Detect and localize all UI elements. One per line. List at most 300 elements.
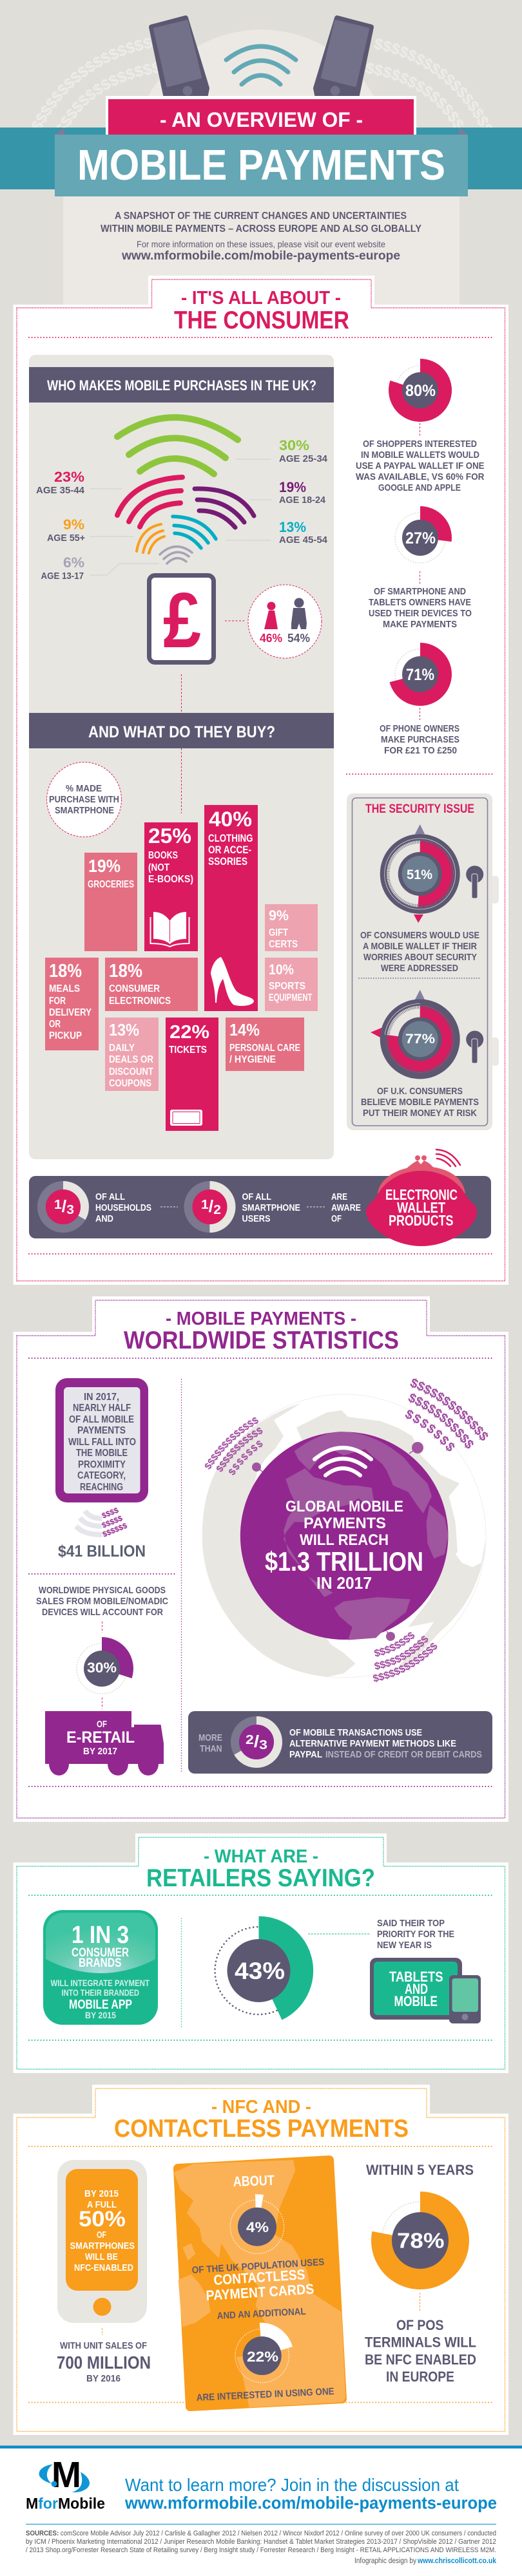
label: age 18-24 <box>250 479 326 506</box>
ribbon back <box>0 128 522 189</box>
text: unit sales: 700 MILLION <box>57 2353 151 2372</box>
bar: groceries <box>84 853 137 951</box>
icon: wifi on globe <box>314 1448 371 1475</box>
stat: 43 percent: 43% <box>235 1958 285 1984</box>
panel: two thirds band: ALTERNATIVE PAYMENT METHODS LIKE <box>289 1738 456 1749</box>
stat: 27 percent <box>369 506 472 630</box>
label: age 18-24: AGE 18-24 <box>279 495 326 506</box>
dome and arch backdrop <box>63 30 459 309</box>
bar: personal care: PERSONAL CARE <box>229 1043 300 1054</box>
bar: sports: EQUIPMENT <box>269 992 313 1003</box>
stat: 27 percent: OF SMARTPHONE AND <box>374 586 466 597</box>
label: age 18-24: 19% <box>279 479 306 495</box>
heading bar: what do they buy <box>29 713 334 748</box>
dollar clusters: $$$$$$$$$$$ <box>409 1394 474 1449</box>
bar: tickets: 22% <box>169 1022 209 1043</box>
design credit <box>354 2557 497 2565</box>
bar: daily deals: 13% <box>109 1020 139 1039</box>
panel: two thirds band: INSTEAD OF CREDIT OR DEBIT CARDS <box>325 1749 482 1760</box>
globe text: $1.3 TRILLION <box>265 1546 423 1577</box>
stat: 27 percent: USED THEIR DEVICES TO <box>369 608 472 619</box>
section heading: RETAILERS SAYING? <box>146 1864 375 1892</box>
panel: electronic wallet band <box>29 1150 491 1246</box>
heading bar: what do they buy: AND WHAT DO THEY BUY? <box>88 723 275 741</box>
stat: 71 percent: 71% <box>406 666 434 684</box>
donut: two thirds: / <box>254 1732 259 1751</box>
dollar clusters: $$$$$$$ <box>405 1410 455 1452</box>
card: one in three: 1 IN 3 <box>72 1922 129 1949</box>
donut: one half <box>188 1185 231 1229</box>
donut: one half: 2 <box>213 1203 221 1217</box>
stat: 80 percent: GOOGLE AND APPLE <box>378 482 461 493</box>
globe text: PAYMENTS <box>304 1515 386 1532</box>
footer <box>0 2446 522 2576</box>
panel: nfc and contactless <box>13 2085 508 2435</box>
section heading <box>146 1846 375 1892</box>
text: physical goods: DEVICES WILL ACCOUNT FOR <box>42 1607 163 1618</box>
donut: one third <box>41 1185 85 1229</box>
bar: daily deals <box>105 1018 159 1091</box>
icon: signal and dollars: $$$$$$ <box>101 1521 129 1539</box>
icon: phone with 2017 text: REACHING <box>80 1482 123 1493</box>
icon: purse: ELECTRONIC <box>385 1186 458 1203</box>
icon: phone with 2017 text: IN 2017, <box>84 1392 119 1403</box>
icon: phone with 50 percent: BY 2015 <box>84 2188 119 2199</box>
icon: delivery truck: BY 2017 <box>83 1746 117 1757</box>
logo: MforMobile: M <box>52 2454 81 2496</box>
logo: MforMobile <box>26 2454 105 2513</box>
dollar clusters: $$$$$$$ <box>229 1441 263 1475</box>
intro text <box>101 211 421 263</box>
text: physical goods <box>36 1585 168 1618</box>
dollar clusters: $$$$$$$$$$$$$$ <box>372 1643 437 1682</box>
icon: signal and dollars: $$$$ <box>101 1506 120 1520</box>
section heading: - IT'S ALL ABOUT - <box>181 288 341 308</box>
panel: retailers saying <box>13 1833 508 2073</box>
icon: signal and dollars: $$$$$ <box>101 1513 124 1530</box>
text: households <box>95 1191 151 1224</box>
bar: gift certs: GIFT <box>269 927 288 938</box>
panel: worldwide statistics: $41 BILLION <box>58 1542 146 1560</box>
label: age 13-17: AGE 13-17 <box>41 571 84 582</box>
uk map <box>174 2160 345 2407</box>
call to action <box>124 2475 497 2513</box>
section heading: - NFC AND - <box>211 2097 311 2117</box>
icon: tablet and mobile <box>370 1958 481 2023</box>
section frame <box>13 1296 508 1822</box>
card text: PAYMENT CARDS <box>206 2280 314 2304</box>
label: age 35-44: 23% <box>54 469 84 485</box>
section heading: - MOBILE PAYMENTS - <box>166 1309 356 1329</box>
ribbon front <box>55 135 468 196</box>
icon: left phone <box>151 18 207 98</box>
icon: phone with 50 percent: A FULL <box>87 2199 117 2210</box>
bar: sports: 10% <box>269 961 294 978</box>
text: smartphone users: USERS <box>242 1213 271 1224</box>
stat: 80 percent: WAS AVAILABLE, VS 60% FOR <box>356 471 485 482</box>
icon: signal and dollars <box>76 1506 129 1539</box>
label: age 55+: 9% <box>63 516 84 533</box>
intro text: A SNAPSHOT OF THE CURRENT CHANGES AND UNCERTAINTIES <box>115 211 407 222</box>
bar: meals: 18% <box>49 961 82 981</box>
text: are aware of: ARE <box>331 1191 347 1202</box>
icon: phone with 2017 text: PROXIMITY <box>78 1459 126 1470</box>
stat: 30 percent <box>77 1637 133 1694</box>
gender split circle <box>248 585 322 658</box>
text: households: OF ALL <box>95 1191 125 1202</box>
panel: two thirds band: OF MOBILE TRANSACTIONS USE <box>289 1727 422 1738</box>
text: physical goods: WORLDWIDE PHYSICAL GOODS <box>39 1585 166 1596</box>
bar: meals <box>45 958 99 1050</box>
bar: clothing: OR ACCE- <box>208 844 251 856</box>
text: uk consumers: BELIEVE MOBILE PAYMENTS <box>361 1097 479 1108</box>
icon: purse: PRODUCTS <box>389 1212 454 1229</box>
label: age 45-54: AGE 45-54 <box>279 535 328 545</box>
dollar clusters <box>205 1378 488 1682</box>
title banner <box>0 96 522 196</box>
stat: 71 percent <box>380 643 459 756</box>
dollar clusters: $$$$$$$$ <box>374 1632 415 1658</box>
label: age 13-17: 6% <box>63 554 84 571</box>
icon: woman <box>264 601 278 629</box>
bar: books <box>144 822 198 951</box>
card: one in three: BRANDS <box>79 1956 121 1970</box>
dollar clusters: $$$$$$$$$$$ <box>217 1427 263 1472</box>
bar: groceries: 19% <box>88 856 121 876</box>
panel: the security issue <box>347 793 499 1130</box>
gender split circle: 46% <box>260 632 282 645</box>
bar: tickets <box>166 1018 218 1131</box>
text: unit sales <box>57 2340 151 2384</box>
section heading <box>174 288 349 334</box>
stat: 71 percent: OF PHONE OWNERS <box>380 723 459 734</box>
text: are aware of: OF <box>331 1213 342 1224</box>
dial: 77 percent: 77% <box>405 1032 435 1046</box>
stat: 78 percent: IN EUROPE <box>386 2369 454 2385</box>
section frame <box>13 1833 508 2073</box>
icon: delivery truck <box>45 1711 164 1776</box>
text: consumers would use: A MOBILE WALLET IF THEIR <box>363 941 477 952</box>
bar: daily deals: DAILY <box>109 1043 135 1054</box>
section heading: - WHAT ARE - <box>204 1846 318 1867</box>
bar: personal care <box>226 1018 304 1071</box>
text: smartphone users: SMARTPHONE <box>242 1202 300 1213</box>
label: age 45-54: 13% <box>279 519 306 535</box>
icon: tablet and mobile: MOBILE <box>394 1993 438 2009</box>
donut: two thirds: 2 <box>246 1733 254 1747</box>
text: physical goods: SALES FROM MOBILE/NOMADIC <box>36 1596 168 1607</box>
dial: 51 percent <box>380 824 460 923</box>
icon: phone with 2017 text <box>55 1378 148 1502</box>
intro text: www.mformobile.com/mobile-payments-europe <box>121 249 400 263</box>
callout: legend circle: PURCHASE WITH <box>49 794 119 805</box>
label: age 55+: AGE 55+ <box>47 533 85 544</box>
bar: groceries: GROCERIES <box>88 879 134 890</box>
stat: 80 percent: OF SHOPPERS INTERESTED <box>363 439 477 450</box>
overview label <box>106 96 416 135</box>
stat: 78 percent: BE NFC ENABLED <box>365 2352 476 2367</box>
bar: electronics: 18% <box>109 961 142 981</box>
icon: purse: WALLET <box>397 1199 445 1216</box>
card: contactless payment card: ABOUT <box>233 2172 275 2190</box>
chart: age wifi arcs <box>117 417 254 564</box>
label: age 35-44 <box>36 469 122 496</box>
bar: electronics <box>105 958 198 1011</box>
bar: books: 25% <box>148 824 191 848</box>
stat: 71 percent: MAKE PURCHASES <box>381 734 459 745</box>
text: unit sales: BY 2016 <box>86 2373 121 2384</box>
donut: two thirds: 3 <box>259 1738 267 1752</box>
globe text: WILL REACH <box>300 1531 389 1549</box>
bar: personal care: 14% <box>229 1020 260 1039</box>
stat: 71 percent: FOR £21 TO £250 <box>384 745 457 756</box>
card: one in three: WILL INTEGRATE PAYMENT <box>50 1978 150 1988</box>
overview label: - AN OVERVIEW OF - <box>160 108 363 131</box>
design credit: www.chriscollicott.co.uk <box>417 2557 497 2565</box>
card text: CONTACTLESS <box>213 2266 305 2288</box>
bar: sports: SPORTS <box>269 981 305 992</box>
bar: clothing: SSORIES <box>208 855 247 867</box>
bar: books: BOOKS <box>148 850 178 861</box>
bar: meals: MEALS <box>49 983 80 994</box>
icon: phone with 50 percent: OF <box>97 2230 106 2240</box>
icon: phone with 50 percent <box>57 2160 147 2323</box>
bar: personal care: / HYGIENE <box>229 1054 276 1065</box>
chart: globe <box>202 1378 488 1682</box>
text: uk consumers: OF U.K. CONSUMERS <box>377 1086 463 1097</box>
label: age 25-34: AGE 25-34 <box>279 453 328 464</box>
bar: electronics: ELECTRONICS <box>109 996 171 1007</box>
donut: one third: 1 <box>54 1198 62 1212</box>
section heading: THE CONSUMER <box>174 307 349 334</box>
section heading: CONTACTLESS PAYMENTS <box>114 2115 409 2143</box>
stat: 22 percent: 22% <box>247 2349 278 2365</box>
sources <box>26 2530 496 2554</box>
stat: 4 percent <box>230 2194 284 2253</box>
label: age 13-17 <box>41 554 159 582</box>
icon: phone with 2017 text: CATEGORY, <box>77 1470 126 1481</box>
design credit: Infographic design by <box>354 2557 416 2565</box>
text: are aware of <box>331 1191 361 1224</box>
stat: 80 percent <box>356 359 485 493</box>
bar: daily deals: COUPONS <box>109 1078 151 1089</box>
card text: OF THE UK POPULATION USES <box>191 2257 325 2276</box>
callout: legend circle: % MADE <box>66 783 102 794</box>
icon: phone with 50 percent: WILL BE <box>85 2251 118 2262</box>
donut: one half: / <box>209 1197 213 1216</box>
icon: safe handle <box>466 1030 483 1063</box>
card: one in three <box>43 1910 158 2025</box>
icon: phone with 50 percent: NFC-ENABLED <box>74 2262 133 2273</box>
label: age 55+ <box>47 516 134 544</box>
label: age 25-34: 30% <box>279 437 309 453</box>
stat: 22 percent <box>235 2323 293 2383</box>
section heading <box>114 2097 409 2143</box>
stat: 78 percent: 78% <box>397 2228 445 2253</box>
panel: two thirds band: PAYPAL <box>289 1749 322 1760</box>
stat: 78 percent: WITHIN 5 YEARS <box>366 2162 474 2178</box>
donut: one half: 1 <box>201 1198 209 1212</box>
dollar clusters: $$$$$$$$$$$$$ <box>410 1378 488 1441</box>
text: top priority <box>377 1918 454 1951</box>
bar: sports <box>265 958 318 1011</box>
section frame <box>13 276 508 1285</box>
icon: high heel <box>211 957 254 1006</box>
outer world map <box>202 1394 486 1678</box>
section frame <box>13 2085 508 2435</box>
globe text: IN 2017 <box>316 1573 372 1593</box>
text: consumers would use: WORRIES ABOUT SECURITY <box>363 952 477 963</box>
card text: AND AN ADDITIONAL <box>217 2306 306 2322</box>
icon: safe handle <box>466 866 483 898</box>
card text <box>191 2257 325 2322</box>
callout: legend circle <box>46 762 121 837</box>
card: one in three: MOBILE APP <box>69 1998 132 2012</box>
text: households: AND <box>95 1213 113 1224</box>
bar: meals: OR <box>49 1019 61 1030</box>
icon: man <box>291 598 307 629</box>
bar: books: (NOT <box>148 862 169 873</box>
text: top priority: PRIORITY FOR THE <box>377 1929 454 1940</box>
icon: book <box>151 912 189 947</box>
label: age 45-54 <box>226 519 328 545</box>
section heading <box>124 1309 399 1354</box>
stat: 80 percent: 80% <box>405 382 436 400</box>
bar: tickets: TICKETS <box>169 1045 207 1056</box>
icon: delivery truck: OF <box>97 1719 107 1730</box>
label: age 25-34 <box>237 437 328 464</box>
icon: right phone <box>316 18 371 98</box>
intro text: For more information on these issues, please visit our event website <box>137 239 385 249</box>
section heading: WORLDWIDE STATISTICS <box>124 1327 399 1354</box>
label: age 35-44: AGE 35-44 <box>36 485 85 496</box>
globe text <box>265 1498 423 1593</box>
stat: 27 percent: TABLETS OWNERS HAVE <box>369 597 471 608</box>
stat: 80 percent: IN MOBILE WALLETS WOULD <box>361 450 479 460</box>
donut: two thirds <box>235 1721 278 1763</box>
text: unit sales: WITH UNIT SALES OF <box>60 2340 147 2351</box>
dollar sign arcs <box>32 37 492 128</box>
bar: clothing: 40% <box>209 808 252 831</box>
panel: two thirds band: MORE <box>198 1732 222 1743</box>
donut: one third: / <box>62 1197 66 1216</box>
bar: meals: FOR <box>49 996 66 1007</box>
icon: phone with 2017 text: OF ALL MOBILE <box>69 1414 134 1425</box>
panel: the consumer <box>13 276 508 1285</box>
icon: phone with 2017 text: NEARLY HALF <box>73 1403 131 1414</box>
dial: 77 percent <box>371 990 460 1079</box>
bar: meals: DELIVERY <box>49 1007 92 1018</box>
text: smartphone users <box>242 1191 300 1224</box>
text: consumers would use: WERE ADDRESSED <box>381 963 458 974</box>
text: uk consumers <box>361 1086 479 1119</box>
panel: worldwide statistics <box>13 1296 508 1822</box>
ribbon folds <box>55 128 468 135</box>
dollar clusters: $$$$$$$$$$$$$ <box>205 1417 258 1470</box>
bar: gift certs <box>265 904 318 951</box>
panel: two thirds band: THAN <box>200 1743 222 1754</box>
card: contactless payment card: ARE INTERESTED IN USING ONE <box>196 2386 334 2403</box>
purple globe <box>240 1432 449 1640</box>
text: consumers would use: OF CONSUMERS WOULD USE <box>360 930 479 941</box>
bar: clothing <box>204 805 258 1011</box>
text: consumers would use <box>360 930 479 974</box>
text: top priority: NEW YEAR IS <box>377 1940 432 1951</box>
safe body <box>347 793 499 1130</box>
stat: 43 percent <box>215 1917 313 2020</box>
bar: electronics: CONSUMER <box>109 983 160 994</box>
heading bar: WHO MAKES MOBILE PURCHASES IN THE UK? <box>47 377 316 393</box>
icon: wifi signal <box>226 46 296 84</box>
icon: tablet and mobile: TABLETS <box>389 1969 443 1985</box>
dial: 51 percent: 51% <box>407 867 432 882</box>
stat: 27 percent: MAKE PAYMENTS <box>383 619 457 630</box>
callout: legend circle: SMARTPHONE <box>55 805 114 816</box>
icon: phone with 2017 text: WILL FALL INTO <box>68 1437 136 1448</box>
text: smartphone users: OF ALL <box>242 1191 271 1202</box>
icon: phone with 2017 text: THE MOBILE <box>76 1448 128 1459</box>
stat: 78 percent: TERMINALS WILL <box>365 2334 476 2351</box>
stat: 78 percent: OF POS <box>396 2317 443 2333</box>
stat: 4 percent: 4% <box>246 2219 269 2235</box>
icon: purse <box>366 1150 477 1246</box>
stat: 80 percent: USE A PAYPAL WALLET IF ONE <box>356 460 485 471</box>
icon: phone with 50 percent: SMARTPHONES <box>70 2240 135 2251</box>
icon: delivery truck: E-RETAIL <box>66 1728 135 1747</box>
bar: daily deals: DEALS OR <box>109 1054 153 1065</box>
bar: meals: PICKUP <box>49 1030 82 1041</box>
header illustration <box>32 15 492 305</box>
logo: MforMobile: MforMobile <box>26 2495 105 2513</box>
globe text: GLOBAL MOBILE <box>285 1498 403 1515</box>
icon: map pins <box>252 1442 423 1641</box>
call to action: Want to learn more? Join in the discussion at <box>125 2475 459 2495</box>
bar: books: E-BOOKS) <box>148 874 193 885</box>
dollar clusters: $$$$$$$$$$$ <box>374 1636 428 1671</box>
text: uk consumers: PUT THEIR MONEY AT RISK <box>363 1108 477 1119</box>
bar: clothing: CLOTHING <box>208 832 253 844</box>
icon: ticket <box>170 1110 202 1126</box>
panel: two thirds band <box>188 1711 492 1774</box>
card: contactless payment card <box>174 2160 345 2407</box>
icon: phone with 2017 text: PAYMENTS <box>77 1425 126 1436</box>
donut: one third: 3 <box>66 1203 74 1217</box>
card: one in three: BY 2015 <box>85 2010 116 2020</box>
intro text: WITHIN MOBILE PAYMENTS – ACROSS EUROPE AND ALSO GLOBALLY <box>101 223 421 234</box>
bar: gift certs: CERTS <box>269 939 298 950</box>
text: are aware of: AWARE <box>331 1202 361 1213</box>
card: one in three: CONSUMER <box>72 1946 129 1960</box>
panel: the security issue: THE SECURITY ISSUE <box>365 802 474 816</box>
panel: who makes purchases <box>29 355 334 1159</box>
icon: tablet and mobile: AND <box>405 1981 428 1997</box>
icon: phone with 50 percent: 50% <box>79 2207 126 2231</box>
stat: 27 percent: 27% <box>405 529 436 547</box>
stat: 78 percent <box>365 2162 476 2385</box>
text: top priority: SAID THEIR TOP <box>377 1918 445 1929</box>
main title: MOBILE PAYMENTS <box>77 141 445 189</box>
icon: phone with pound sign <box>150 576 214 664</box>
stat: 30 percent: 30% <box>87 1660 117 1676</box>
bar: gift certs: 9% <box>269 907 289 923</box>
gender split circle: 54% <box>287 632 310 645</box>
bar: daily deals: DISCOUNT <box>109 1066 153 1077</box>
card: one in three: INTO THEIR BRANDED <box>62 1987 139 1998</box>
text: households: HOUSEHOLDS <box>95 1202 151 1213</box>
icon: phone with pound sign: £ <box>163 576 201 664</box>
call to action: www.mformobile.com/mobile-payments-europe <box>124 2494 497 2513</box>
heading bar <box>29 367 334 402</box>
